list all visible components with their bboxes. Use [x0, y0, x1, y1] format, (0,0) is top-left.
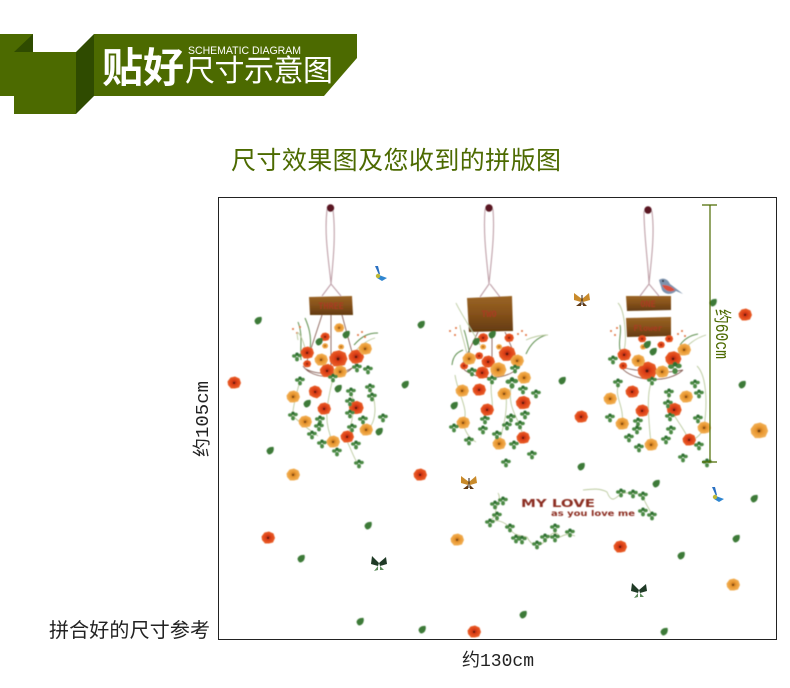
wood sign THREE — [309, 296, 353, 315]
clover leaves — [605, 341, 712, 467]
hanging basket: TWO — [449, 204, 548, 467]
grass and berries — [610, 325, 698, 350]
assembled size caption: 拼合好的尺寸参考 — [49, 619, 210, 642]
MY LOVE lettering: MY LOVE — [521, 497, 595, 510]
garland vines — [487, 489, 652, 545]
sticker frame — [218, 198, 776, 640]
banner bold heading: 贴好 — [102, 45, 184, 91]
banner English subtitle: SCHEMATIC DIAGRAM — [188, 45, 301, 57]
bird — [659, 279, 683, 294]
vines — [617, 303, 706, 445]
grass and berries — [449, 327, 546, 365]
red flowers — [618, 335, 696, 446]
scattered red petals — [228, 308, 752, 638]
garland clovers — [485, 488, 657, 549]
orange flowers — [456, 344, 531, 450]
wood sign TWO: TWO — [481, 310, 497, 320]
grass and berries — [292, 318, 378, 360]
orange flowers — [604, 344, 711, 450]
section title: 尺寸效果图及您收到的拼版图 — [231, 147, 561, 175]
scattered green leaves — [254, 299, 758, 636]
dark butterfly right — [631, 583, 647, 598]
yellow butterfly middle — [461, 476, 477, 489]
yellow butterfly top — [574, 293, 590, 306]
clover leaves — [449, 331, 541, 467]
basket wires — [621, 367, 683, 379]
header banner — [0, 34, 357, 114]
60cm dimension line — [702, 205, 717, 462]
orange flowers — [286, 323, 373, 448]
pin and rope — [480, 204, 500, 297]
dark butterfly left — [371, 556, 387, 571]
pin and rope — [322, 204, 341, 296]
banner ribbon — [94, 34, 357, 96]
60cm label: 约60cm — [710, 309, 732, 359]
hanging basket: THREE — [286, 204, 388, 468]
scattered petals and leaves — [228, 299, 768, 638]
red flowers — [460, 333, 531, 444]
basket wires — [461, 332, 520, 378]
scattered orange petals — [286, 423, 768, 590]
wood sign THREE: THREE — [318, 302, 344, 312]
blue butterfly top — [375, 266, 387, 281]
wood sign Flower — [626, 317, 671, 337]
105cm label: 约105cm — [192, 381, 214, 457]
banner light heading: 尺寸示意图 — [185, 55, 333, 88]
vines — [293, 333, 375, 464]
vines — [455, 303, 548, 444]
pin and rope — [640, 206, 659, 296]
wood sign ONE — [626, 296, 671, 311]
basket wires — [303, 315, 356, 376]
as you love me lettering: as you love me — [551, 509, 636, 518]
wood sign TWO — [467, 296, 513, 332]
MY LOVE garland — [485, 488, 657, 549]
wood sign Flower: Flower — [634, 324, 663, 333]
130cm label: 约130cm — [462, 650, 534, 672]
wood sign ONE: ONE — [640, 300, 656, 310]
butterflies — [371, 266, 724, 598]
banner back fold — [0, 34, 76, 114]
clover leaves — [288, 331, 388, 468]
hanging basket: ONE Flower — [604, 206, 712, 467]
blue butterfly right — [712, 487, 724, 502]
red flowers — [300, 332, 364, 442]
